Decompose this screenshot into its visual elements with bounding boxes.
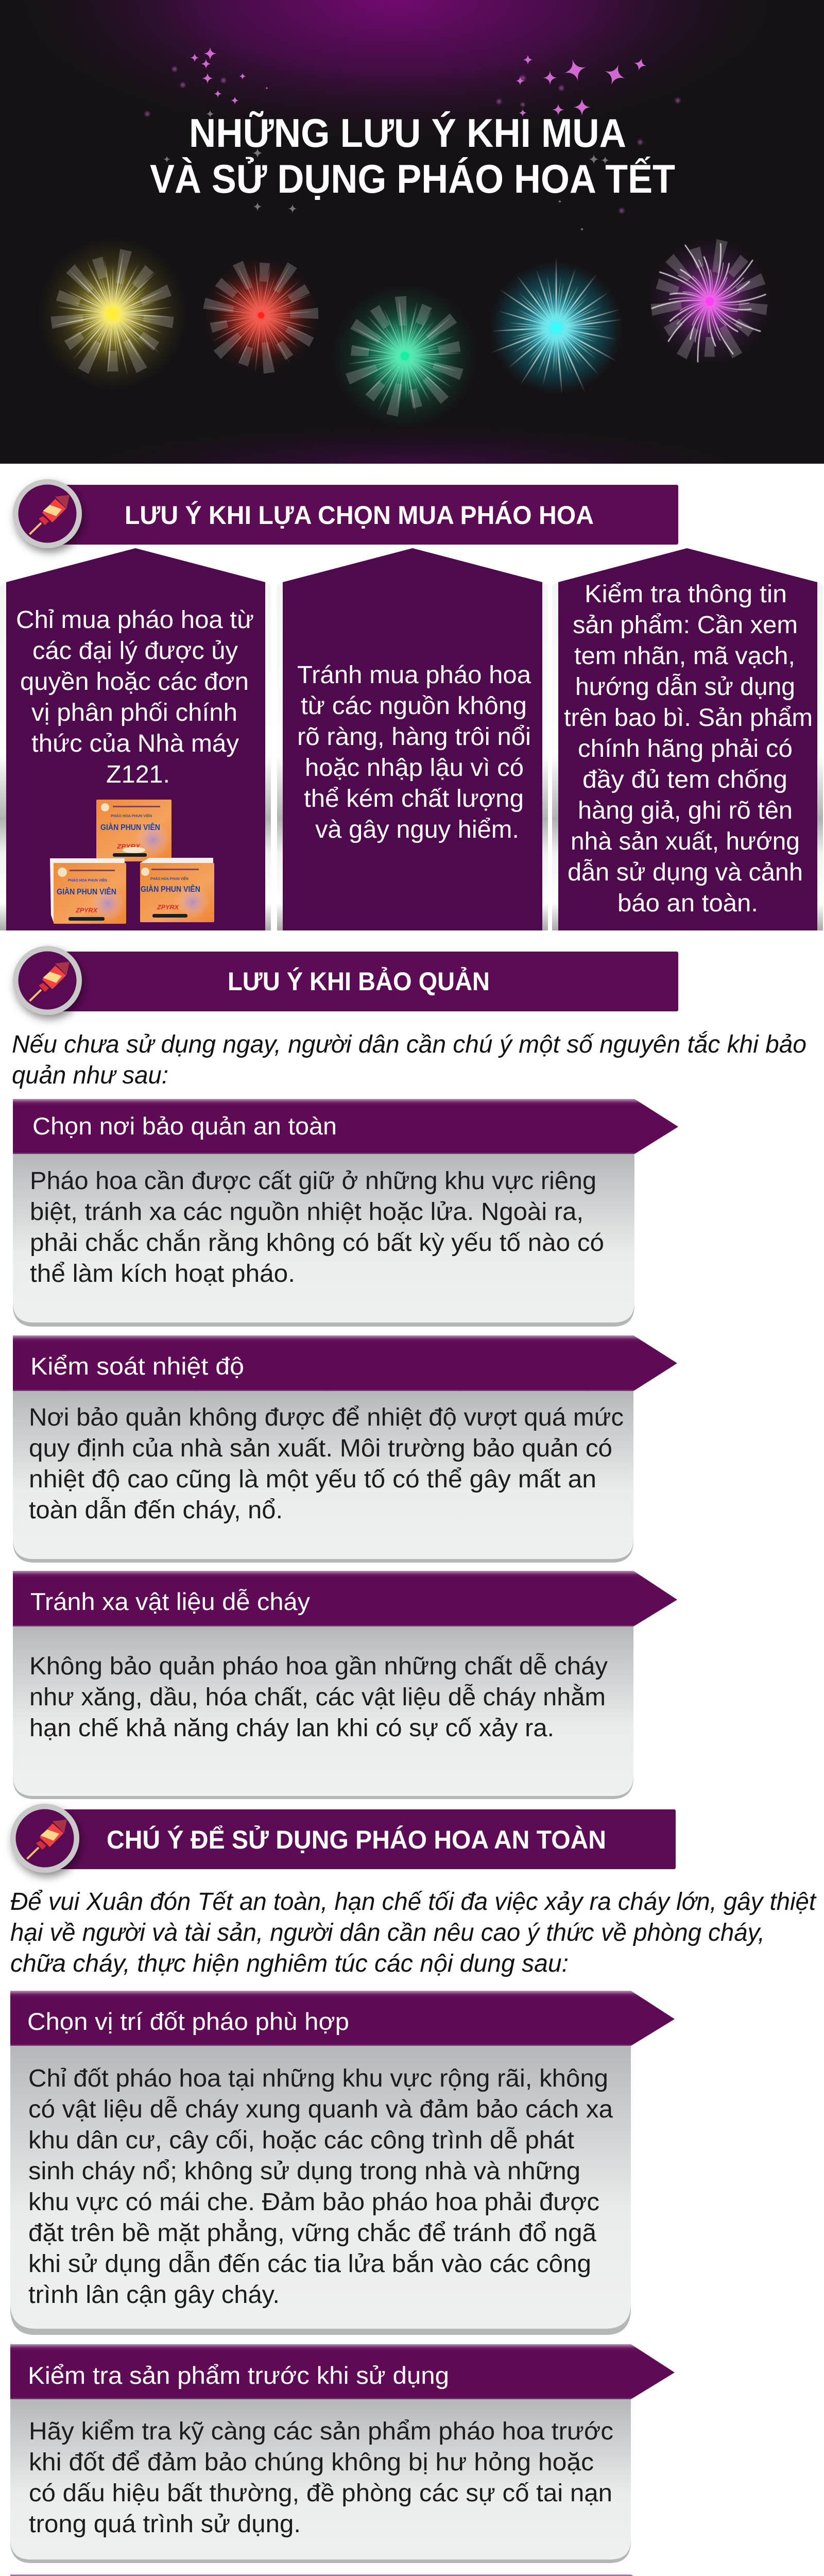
panel: choose location [10, 1991, 675, 2335]
panel: away from flammables: Không bảo quản pháo hoa gần những chất dễ cháy [29, 1652, 608, 1680]
section header: storage: LƯU Ý KHI BẢO QUẢN [228, 967, 490, 996]
firework: green [340, 291, 470, 420]
panel: card 2 avoid unknown sources: từ các nguồn không [301, 692, 527, 720]
product image: boxes of fireworks: GIÀN PHUN VIÊN [57, 887, 116, 896]
panel: card 2 avoid unknown sources [277, 548, 548, 930]
panel: choose location: trình lân cận gây cháy. [28, 2281, 280, 2309]
section header: safe use [10, 1804, 676, 1873]
panel: choose location: có vật liệu dễ cháy xung quanh và đảm bảo cách xa [28, 2095, 613, 2123]
panel: read instructions [10, 2574, 675, 2576]
panel: temperature control: toàn dẫn đến cháy, nổ. [29, 1496, 283, 1524]
product image: boxes of fireworks [50, 800, 214, 924]
sparkles above title [163, 47, 648, 231]
intro text: storage: Nếu chưa sử dụng ngay, người dân cần chú ý một số nguyên tắc khi bảo [12, 1031, 806, 1058]
panel: choose location: khu vực có mái che. Đảm bảo pháo hoa phải được [28, 2189, 599, 2216]
panel: card 3 check product info: sản phẩm: Cần xem [573, 612, 798, 639]
title: VÀ SỬ DỤNG PHÁO HOA TẾT [150, 156, 675, 201]
panel: card 3 check product info: hướng dẫn sử dụng [575, 673, 795, 701]
section header: safe use: CHÚ Ý ĐỂ SỬ DỤNG PHÁO HOA AN TOÀN [107, 1825, 606, 1854]
panel: card 3 check product info: hàng giả, ghi rõ tên [578, 797, 793, 824]
panel: choose location: Chọn vị trí đốt pháo phù hợp [27, 2008, 349, 2035]
panel: choose location: khi sử dụng dẫn đến các tia lửa bắn vào các công [28, 2250, 591, 2278]
panel: temperature control: nhiệt độ cao cũng là một yếu tố có thể gây mất an [29, 1466, 596, 1493]
panel: choose location: sinh cháy nổ; không sử dụng trong nhà và những [28, 2158, 580, 2185]
section header: buying [13, 479, 678, 548]
panel: card 1 authorised dealers: thức của Nhà máy [31, 730, 239, 757]
panel: check product before use: có dấu hiệu bất thường, đề phòng các sự cố tai nạn [29, 2480, 612, 2507]
panel: choose location: khu dân cư, cây cối, hoặc các công trình dễ phát [28, 2126, 574, 2154]
panel: safe storage place [13, 1099, 678, 1327]
intro text: safe use: Để vui Xuân đón Tết an toàn, hạn chế tối đa việc xảy ra cháy lớn, gây thiệt [10, 1888, 817, 1916]
panel: card 3 check product info: nhà sản xuất, hướng [571, 828, 800, 855]
product image: boxes of fireworks: GIÀN PHUN VIÊN [141, 884, 200, 894]
panel: card 2 avoid unknown sources: thể kém chất lượng [304, 785, 524, 812]
panel: away from flammables: như xăng, dầu, hóa chất, các vật liệu dễ cháy nhằm [29, 1683, 606, 1711]
panel: card 1 authorised dealers: Z121. [106, 761, 170, 788]
panel: safe storage place: thể làm kích hoạt pháo. [30, 1260, 295, 1287]
panel: card 3 check product info: tem nhãn, mã vạch, [574, 642, 795, 670]
section header: storage [13, 946, 678, 1015]
panel: away from flammables: hạn chế khả năng cháy lan khi có sự cố xảy ra. [29, 1715, 554, 1742]
panel: card 1 authorised dealers: vị phân phối chính [31, 699, 237, 726]
panel: card 3 check product info: Kiểm tra thông tin [585, 581, 787, 608]
panel: check product before use [10, 2344, 675, 2563]
panel: card 1 authorised dealers: quyền hoặc các đơn [20, 668, 249, 696]
firework: yellow [46, 246, 179, 382]
panel: check product before use: khi đốt để đảm bảo chúng không bị hư hỏng hoặc [29, 2449, 594, 2476]
hero banner [0, 0, 824, 515]
intro text: safe use [10, 1888, 817, 1977]
panel: temperature control: Kiểm soát nhiệt độ [30, 1352, 244, 1380]
panel: card 3 check product info: chính hãng phải có [578, 735, 793, 762]
panel: card 2 avoid unknown sources: rõ ràng, hàng trôi nổi [297, 723, 531, 751]
panel: card 2 avoid unknown sources: và gây nguy hiểm. [315, 816, 519, 843]
panel: check product before use: Hãy kiểm tra kỹ càng các sản phẩm pháo hoa trước [29, 2418, 613, 2445]
panel: card 3 check product info: trên bao bì. Sản phẩm [564, 704, 813, 732]
section header: buying: LƯU Ý KHI LỰA CHỌN MUA PHÁO HOA [125, 501, 594, 530]
product image: boxes of fireworks: ZPYRX [116, 843, 141, 850]
panel: card 2 avoid unknown sources: hoặc nhập lậu vì có [305, 754, 524, 782]
title: NHỮNG LƯU Ý KHI MUA [189, 110, 626, 156]
panel: card 2 avoid unknown sources: Tránh mua pháo hoa [297, 662, 531, 689]
firework: red [203, 261, 318, 374]
title [150, 110, 675, 201]
panel: safe storage place: phải chắc chắn rằng không có bất kỳ yếu tố nào có [30, 1229, 604, 1257]
panel: safe storage place: Chọn nơi bảo quản an toàn [32, 1112, 337, 1140]
intro text: safe use: hại về người và tài sản, người dân cần nêu cao ý thức về phòng cháy, [10, 1919, 765, 1946]
panel: card 3 check product info: báo an toàn. [617, 890, 758, 917]
panel: temperature control [13, 1335, 677, 1563]
panel: safe storage place: Pháo hoa cần được cất giữ ở những khu vực riêng [30, 1167, 596, 1195]
panel: card 3 check product info [552, 548, 823, 930]
product image: boxes of fireworks: PHÁO HOA PHUN VIÊN [111, 814, 152, 818]
panel: card 3 check product info: đầy đủ tem chống [582, 766, 787, 793]
panel: check product before use: Kiểm tra sản phẩm trước khi sử dụng [28, 2362, 449, 2389]
intro text: storage [12, 1031, 806, 1089]
panel: away from flammables: Tránh xa vật liệu dễ cháy [30, 1588, 311, 1615]
panel: choose location: Chỉ đốt pháo hoa tại những khu vực rộng rãi, không [28, 2065, 608, 2092]
panel: temperature control: quy định của nhà sản xuất. Môi trường bảo quản có [29, 1435, 612, 1462]
intro text: safe use: chữa cháy, thực hiện nghiêm túc các nội dung sau: [10, 1950, 569, 1977]
product image: boxes of fireworks: PHÁO HOA PHUN VIÊN [68, 878, 107, 883]
firework: cyan [492, 258, 622, 394]
panel: check product before use: trong quá trình sử dụng. [29, 2511, 301, 2538]
product image: boxes of fireworks: ZPYRX [157, 904, 179, 911]
intro text: storage: quản như sau: [12, 1062, 168, 1089]
panel: card 1 authorised dealers: Chỉ mua pháo hoa từ [16, 606, 254, 634]
firework: magenta [651, 239, 767, 363]
panel: choose location: đặt trên bề mặt phẳng, vững chắc để tránh đổ ngã [28, 2218, 596, 2247]
panel: temperature control: Nơi bảo quản không được để nhiệt độ vượt quá mức [29, 1404, 624, 1431]
product image: boxes of fireworks: GIÀN PHUN VIÊN [100, 822, 160, 832]
panel: card 3 check product info: dẫn sử dụng và cảnh [568, 858, 803, 886]
panel: safe storage place: biệt, tránh xa các nguồn nhiệt hoặc lửa. Ngoài ra, [30, 1198, 583, 1226]
product image: boxes of fireworks: PHÁO HOA PHUN VIÊN [150, 876, 188, 881]
panel: away from flammables [13, 1571, 677, 1799]
product image: boxes of fireworks: ZPYRX [75, 907, 98, 914]
panel: card 1 authorised dealers: các đại lý được ủy [32, 637, 238, 665]
panel: card 1 authorised dealers [0, 548, 271, 930]
